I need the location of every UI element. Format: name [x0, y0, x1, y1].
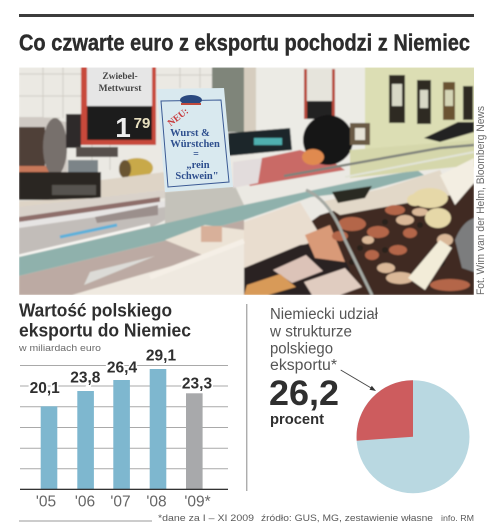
pie heading: eksportu* [270, 357, 337, 374]
chart heading: eksportu do Niemiec [19, 320, 191, 340]
big number: 26,2 [269, 374, 339, 413]
figure behind the counter [244, 150, 345, 186]
year labels [36, 494, 211, 511]
top rule [19, 14, 474, 17]
chart subtitle: w miliardach euro [18, 343, 101, 354]
card: Wurst & Würstchen: Würstchen [170, 139, 220, 150]
footnote and source: źródło: GUS, MG, zestawienie własne [261, 513, 433, 524]
footnote and source: info. RM [441, 513, 474, 523]
meat trays [273, 255, 323, 283]
card: Wurst & Würstchen: = [193, 149, 199, 160]
pie heading: polskiego [270, 340, 333, 358]
card: Wurst & Würstchen: „rein [186, 160, 210, 171]
value labels: 23,8 [70, 370, 101, 387]
year labels: '07 [110, 494, 131, 511]
chart heading: Wartość polskiego [19, 300, 172, 320]
value labels: 26,4 [107, 359, 137, 376]
pie heading [269, 306, 379, 374]
divider [246, 304, 247, 491]
photo: meat counter [19, 67, 475, 295]
counter bands [19, 172, 165, 208]
value labels: 29,1 [146, 348, 176, 365]
card: Wurst & Würstchen [157, 88, 233, 192]
value labels: 20,1 [30, 380, 60, 397]
bar: 2009 [186, 393, 203, 489]
sign: Zwiebel-Mettwurst price: Mettwurst [99, 84, 142, 94]
sign: Zwiebel-Mettwurst price: Zwiebel- [102, 72, 138, 82]
bar chart [20, 348, 228, 511]
footer rule [19, 520, 152, 522]
bar: 2007 [113, 380, 130, 489]
sign: Zwiebel-Mettwurst price: 79 [134, 115, 150, 132]
unit label: procent [270, 412, 324, 428]
wall sign right [304, 69, 335, 119]
pie heading: w strukturze [269, 324, 352, 340]
bar: 2006 [77, 391, 94, 489]
bar: 2005 [41, 406, 57, 489]
year labels: '08 [146, 494, 167, 511]
photo credit: Fot. Wim van der Helm, Bloomberg News [475, 106, 487, 295]
card: Wurst & Würstchen: Schwein" [175, 171, 219, 182]
sign: Zwiebel-Mettwurst price [99, 72, 150, 143]
pie heading: Niemiecki udział [270, 306, 379, 323]
slicer machine [19, 117, 68, 173]
value labels [30, 348, 212, 397]
value labels: 23,3 [182, 375, 212, 392]
display case interior [306, 182, 474, 295]
year labels: '09* [184, 494, 211, 511]
wall holders [389, 75, 405, 123]
arrow [341, 370, 376, 391]
card: Wurst & Würstchen: Wurst & [170, 128, 210, 139]
year labels: '06 [75, 494, 95, 511]
card: Wurst & Würstchen: NEU: [166, 107, 191, 129]
chart heading [19, 300, 191, 340]
bar: 2008 [150, 369, 166, 489]
footnote and source: *dane za I – XI 2009 [158, 513, 254, 524]
footnote and source [158, 513, 474, 524]
sign: Zwiebel-Mettwurst price: 1 [115, 112, 131, 143]
pie chart [356, 380, 470, 493]
year labels: '05 [36, 494, 56, 511]
